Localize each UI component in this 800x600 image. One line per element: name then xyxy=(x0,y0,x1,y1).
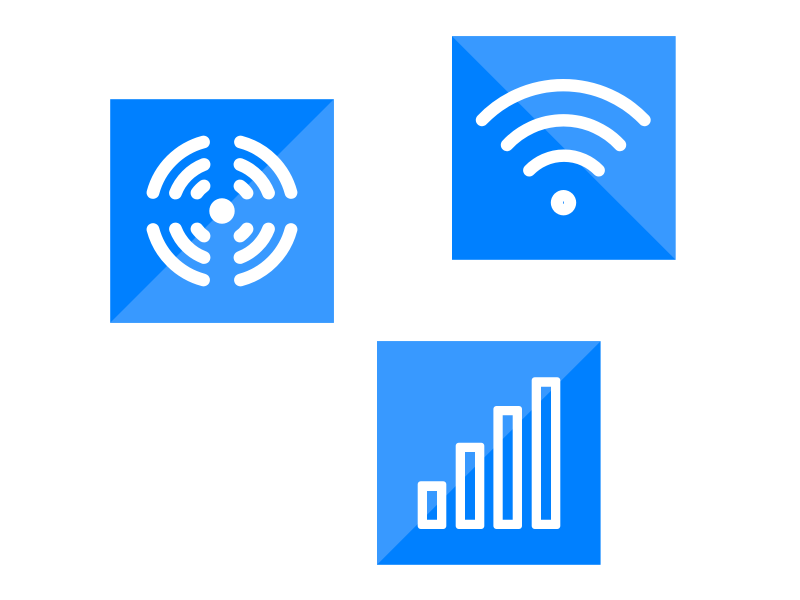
icon: signal bars tile xyxy=(377,341,601,565)
icon: radar centre dot xyxy=(209,198,235,224)
icon: wifi arcs xyxy=(482,85,644,170)
icon: radar arcs xyxy=(153,142,291,280)
icon: wifi tile xyxy=(452,36,676,260)
icon: radar signal tile xyxy=(110,99,334,323)
icon: signal bars xyxy=(418,377,560,529)
icon: wifi dot xyxy=(551,190,576,215)
